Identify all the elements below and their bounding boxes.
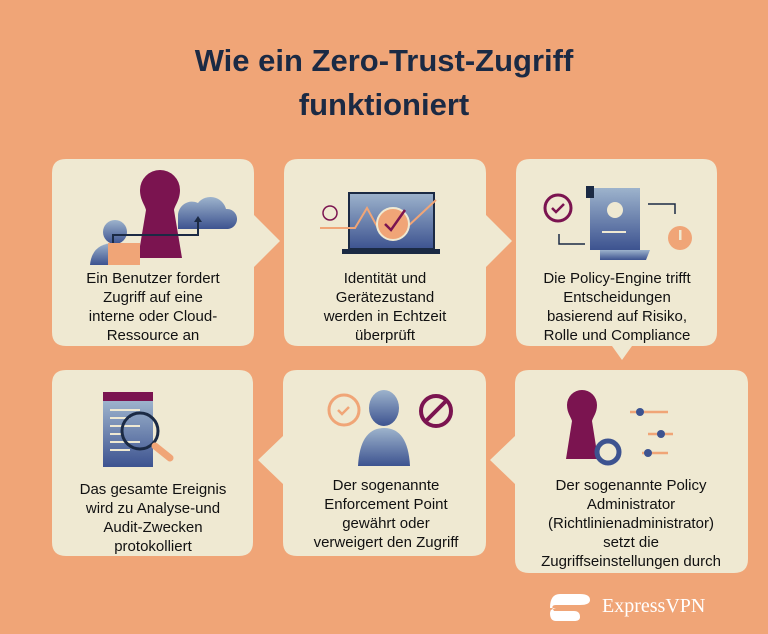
icon: person with check and deny [329, 390, 451, 466]
text: step 4: (Richtlinienadministrator) [548, 515, 714, 532]
title: funktioniert [299, 87, 469, 122]
text: step 4: Administrator [587, 496, 675, 513]
text: step 3: Die Policy-Engine trifft [543, 270, 691, 287]
text: step 3: Entscheidungen [563, 289, 671, 306]
text: step 3: Rolle und Compliance [544, 327, 690, 344]
logo: ExpressVPN: ExpressVPN [602, 595, 705, 617]
text: step 1 [86, 270, 221, 344]
panel: step 5 enforcement [258, 370, 486, 556]
text: step 1: interne oder Cloud- [89, 308, 217, 325]
icon: laptop with clock [320, 193, 440, 254]
text: step 5: Enforcement Point [324, 496, 449, 513]
panel: step 6 audit log [52, 370, 253, 556]
text: step 3: basierend auf Risiko, [547, 308, 687, 325]
text: step 5 [314, 477, 459, 551]
text: step 6: Audit-Zwecken [103, 519, 203, 536]
text: step 2: überprüft [355, 327, 416, 344]
panel: step 2 verification [284, 159, 512, 346]
text: step 4: Zugriffseinstellungen durch [541, 553, 721, 570]
panel: step 1 request [52, 159, 280, 346]
icon: user with keyhole and cloud [90, 170, 237, 265]
text: step 1: Zugriff auf eine [103, 289, 203, 306]
icon: calendar with magnifier [103, 392, 170, 467]
title: Wie ein Zero-Trust-Zugriff [195, 43, 574, 78]
icon: keyhole with gear and sliders [566, 390, 673, 463]
text: step 5: gewährt oder [342, 515, 430, 532]
text: step 3 [543, 270, 691, 344]
text: step 4: setzt die [603, 534, 659, 551]
panel: step 3 policy engine [516, 159, 717, 360]
text: step 2 [323, 270, 447, 344]
text: step 1: Ein Benutzer fordert [86, 270, 221, 287]
text: step 5: Der sogenannte [333, 477, 439, 494]
text: step 4 [541, 477, 721, 570]
text: step 1: Ressource an [107, 327, 199, 344]
text: step 6: wird zu Analyse-und [85, 500, 220, 517]
logo: ExpressVPN [550, 594, 705, 621]
text: step 2: Gerätezustand [336, 289, 434, 306]
text: step 6 [80, 481, 226, 555]
icon: policy document [545, 186, 692, 260]
text: step 2: werden in Echtzeit [323, 308, 447, 325]
text: step 5: verweigert den Zugriff [314, 534, 459, 551]
text: step 2: Identität und [344, 270, 426, 287]
title [195, 43, 574, 122]
panel: step 4 administrator [490, 370, 748, 573]
text: step 6: Das gesamte Ereignis [80, 481, 226, 498]
text: step 4: Der sogenannte Policy [556, 477, 707, 494]
text: step 6: protokolliert [114, 538, 193, 555]
